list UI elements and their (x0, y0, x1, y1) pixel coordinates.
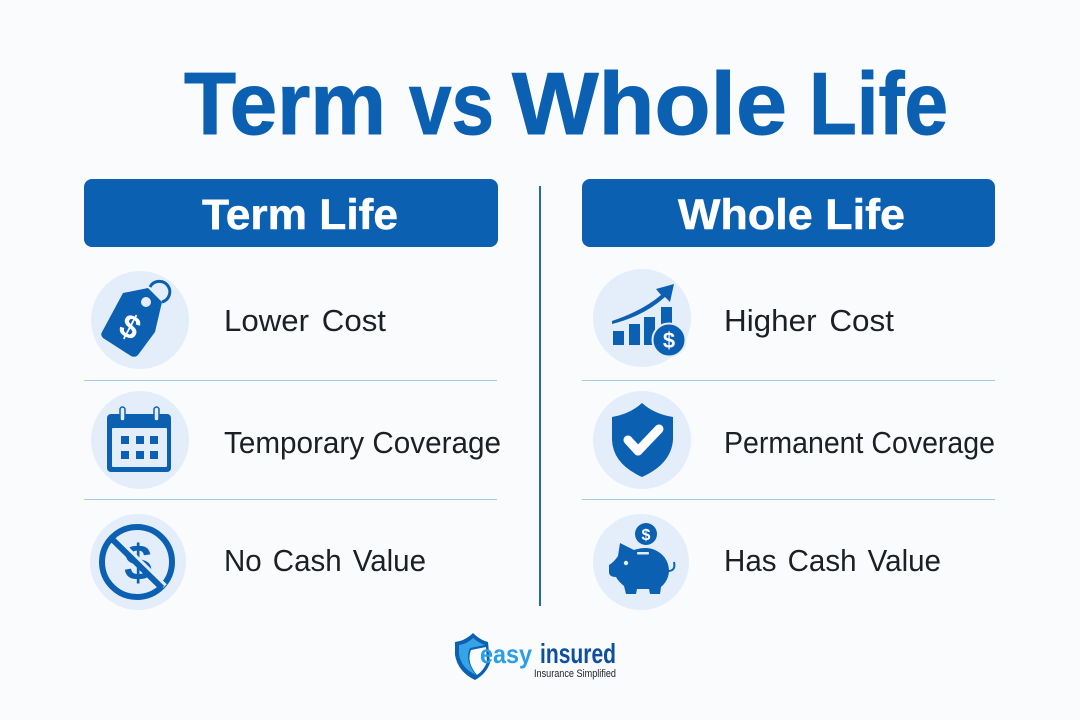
logo wordmark: easy (480, 639, 532, 669)
row text: no cash value: No Cash Value (224, 543, 426, 578)
row text: permanent coverage: Permanent Coverage (724, 425, 995, 460)
row text: lower cost: Lower Cost (224, 303, 386, 338)
icon: shield check (593, 391, 691, 489)
logo tagline: Insurance Simplified (534, 668, 616, 680)
row text: temporary coverage: Temporary Coverage (224, 425, 501, 460)
icon: price tag (91, 271, 189, 369)
icon: price tag: $ (113, 306, 147, 347)
logo wordmark insured: insured (540, 638, 616, 669)
logo shield (455, 633, 490, 680)
icon: no cash: $ (124, 535, 152, 591)
whole life header (582, 179, 995, 247)
title: Whole (512, 54, 787, 153)
icon: growth chart: $ (663, 328, 675, 353)
center divider (539, 186, 541, 606)
icon: no cash (90, 514, 186, 610)
panel: whole life (582, 179, 995, 610)
term life header: Term Life (202, 191, 398, 239)
icon: growth chart (593, 269, 691, 367)
title: Term (184, 54, 386, 153)
row text: higher cost: Higher Cost (724, 303, 894, 338)
term life header (84, 179, 498, 247)
whole life header: Whole Life (678, 191, 905, 239)
icon: piggy bank: $ (642, 527, 651, 544)
row text: has cash value: Has Cash Value (724, 543, 941, 578)
icon: piggy bank (593, 514, 689, 610)
logo: easy insured (455, 633, 616, 680)
icon: calendar (91, 391, 189, 489)
title (184, 54, 948, 153)
title: Life (809, 54, 948, 153)
title: vs (409, 54, 494, 153)
panel: term life (84, 179, 501, 610)
